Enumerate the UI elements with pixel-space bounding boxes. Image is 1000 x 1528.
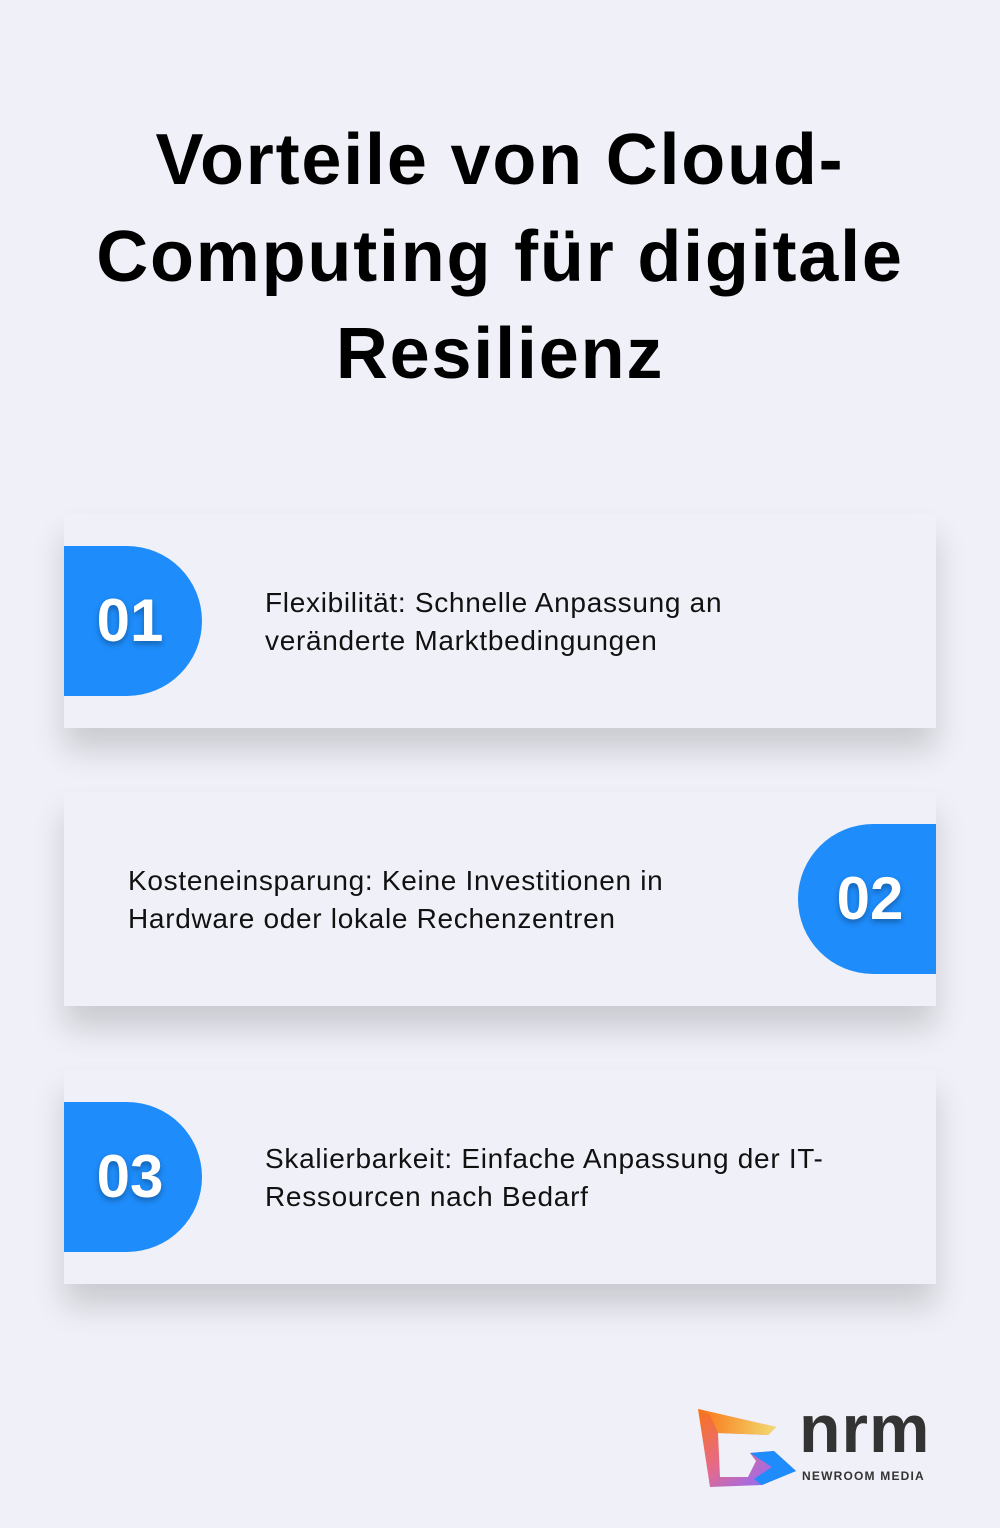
card 3 bbox=[64, 1070, 936, 1284]
title: Computing für digitale bbox=[96, 217, 904, 297]
logo: NEWROOM MEDIA bbox=[802, 1469, 925, 1483]
text 3 bbox=[265, 1143, 824, 1212]
badge 01: 01 bbox=[97, 587, 163, 654]
badge 02 bbox=[798, 824, 936, 974]
title: Vorteile von Cloud- bbox=[156, 120, 844, 200]
badge 03 bbox=[64, 1102, 202, 1252]
icon: logo mark bbox=[698, 1409, 796, 1487]
logo bbox=[698, 1391, 930, 1487]
badge 01 bbox=[64, 546, 202, 696]
logo text: nrm bbox=[799, 1391, 930, 1467]
text 3: Skalierbarkeit: Einfache Anpassung der IT- bbox=[265, 1143, 824, 1174]
text 2 bbox=[128, 865, 663, 934]
text 1: veränderte Marktbedingungen bbox=[265, 625, 657, 656]
text 1: Flexibilität: Schnelle Anpassung an bbox=[265, 587, 722, 618]
text 1 bbox=[265, 587, 722, 656]
card 1 bbox=[64, 514, 936, 728]
card 2 bbox=[64, 792, 936, 1006]
text 2: Hardware oder lokale Rechenzentren bbox=[128, 903, 616, 934]
text 3: Ressourcen nach Bedarf bbox=[265, 1181, 589, 1212]
badge 03: 03 bbox=[97, 1143, 163, 1210]
title bbox=[96, 120, 904, 394]
title: Resilienz bbox=[336, 314, 664, 394]
badge 02: 02 bbox=[837, 865, 903, 932]
text 2: Kosteneinsparung: Keine Investitionen in bbox=[128, 865, 663, 896]
